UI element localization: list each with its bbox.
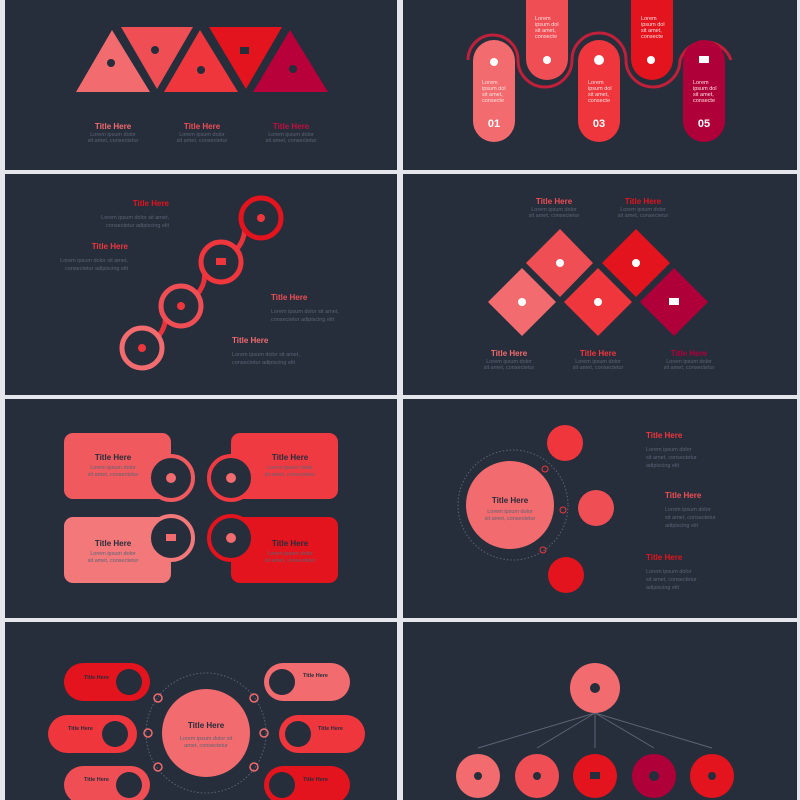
text 1: consectetur adipiscing elit	[106, 223, 169, 229]
pill 03: consecte	[588, 98, 610, 104]
text group 3: Lorem ipsum dolor	[268, 132, 314, 138]
connectors	[478, 713, 712, 748]
satellite texts: adipiscing elit	[646, 585, 679, 591]
box texts: Title Here	[272, 453, 309, 462]
box TL	[64, 433, 171, 499]
box texts: Lorem ipsum dolor	[267, 551, 313, 557]
text group 3	[266, 122, 317, 144]
box BR	[231, 517, 338, 583]
bottom texts: Title Here	[671, 349, 708, 358]
text group 1: Title Here	[95, 122, 132, 131]
circle 1	[122, 328, 162, 368]
pill texts: Title Here	[318, 726, 343, 732]
box texts: sit amet, consectetur	[88, 472, 139, 478]
triangle 3	[164, 30, 238, 92]
box texts: sit amet, consectetur	[265, 472, 316, 478]
pill 02	[526, 0, 568, 80]
pill 01: sit amet,	[482, 92, 503, 98]
text 2: consectetur adipiscing elit	[65, 266, 128, 272]
bottom texts: sit amet, consectetur	[664, 365, 715, 371]
pill 01: Lorem	[482, 80, 498, 86]
pill 04: consecte	[641, 34, 663, 40]
circles	[149, 456, 253, 560]
icons	[107, 46, 297, 74]
pill 02: consecte	[535, 34, 557, 40]
pill 05	[683, 40, 725, 142]
pills	[48, 663, 365, 800]
panel: hub circle	[403, 399, 797, 618]
pill 04	[631, 0, 673, 80]
panel: chain circles	[5, 174, 397, 395]
pill texts: Title Here	[68, 726, 93, 732]
satellite texts: Title Here	[646, 553, 683, 562]
pill 05: sit amet,	[693, 92, 714, 98]
satellite texts: sit amet, consectetur	[665, 515, 716, 521]
text 2: Title Here	[92, 242, 129, 251]
panel: diamonds	[403, 174, 797, 395]
center circle: Title Here	[188, 721, 225, 730]
bottom texts: sit amet, consectetur	[573, 365, 624, 371]
panel: triangles	[5, 0, 397, 170]
diamond 2	[602, 229, 670, 297]
pill 01: consecte	[482, 98, 504, 104]
panel: four boxes	[5, 399, 397, 618]
satellite texts: Lorem ipsum dolor	[646, 569, 692, 575]
bottom texts: Lorem ipsum dolor	[575, 359, 621, 365]
dotted ring	[146, 673, 266, 793]
circle 2	[161, 286, 201, 326]
pill 04: Lorem	[641, 16, 657, 22]
bottom texts: Title Here	[580, 349, 617, 358]
pill 02: sit amet,	[535, 28, 556, 34]
pill texts: Title Here	[84, 777, 109, 783]
diamond 5	[640, 268, 708, 336]
diamond 1	[526, 229, 593, 297]
text 4: Title Here	[232, 336, 269, 345]
bottom texts: sit amet, consectetur	[484, 365, 535, 371]
icons	[138, 214, 265, 352]
central circle: sit amet, consectetur	[485, 516, 536, 522]
center circle: Lorem ipsum dolor sit	[180, 736, 233, 742]
triangle 1	[76, 30, 150, 92]
panel: tree	[403, 622, 797, 800]
connectors	[157, 217, 245, 338]
top circle	[570, 663, 620, 713]
satellite texts: Title Here	[665, 491, 702, 500]
pill 04: sit amet,	[641, 28, 662, 34]
box texts: sit amet, consectetur	[88, 558, 139, 564]
pill 02: ipsum dol	[535, 22, 559, 28]
pill texts: Title Here	[303, 777, 328, 783]
nodes	[144, 694, 268, 771]
pill 05: consecte	[693, 98, 715, 104]
panel: six pills hub	[5, 622, 397, 800]
text 2	[60, 242, 129, 272]
box texts	[88, 453, 316, 564]
pill 03	[578, 40, 620, 142]
text group 2	[177, 122, 228, 144]
bottom texts: Title Here	[491, 349, 528, 358]
satellite texts: Lorem ipsum dolor	[646, 447, 692, 453]
dotted ring	[458, 450, 568, 560]
panel: pills wave	[403, 0, 797, 170]
pill 03: Lorem	[588, 80, 604, 86]
pill 04: ipsum dol	[641, 22, 665, 28]
box BL	[64, 517, 171, 583]
icons	[518, 259, 679, 306]
box texts: sit amet, consectetur	[265, 558, 316, 564]
bottom circles	[456, 754, 734, 798]
top texts: Title Here	[536, 197, 573, 206]
pill texts	[68, 673, 343, 783]
pill 03: 03	[593, 118, 605, 130]
wave line	[468, 33, 731, 87]
text group 3: sit amet, consectetur	[266, 138, 317, 144]
text 3	[271, 293, 339, 323]
text group 1: Lorem ipsum dolor	[90, 132, 136, 138]
pill texts: Title Here	[84, 675, 109, 681]
pill 03: ipsum dol	[588, 86, 612, 92]
box texts: Lorem ipsum dolor	[90, 465, 136, 471]
text 4: consectetur adipiscing elit	[232, 360, 295, 366]
bottom texts	[484, 349, 715, 371]
bottom texts: Lorem ipsum dolor	[486, 359, 532, 365]
text 4	[232, 336, 300, 366]
icons	[166, 473, 236, 543]
text 3: Title Here	[271, 293, 308, 302]
satellite texts: Title Here	[646, 431, 683, 440]
icons	[474, 771, 716, 781]
top texts: Title Here	[625, 197, 662, 206]
text group 2: Lorem ipsum dolor	[179, 132, 225, 138]
box texts: Title Here	[95, 453, 132, 462]
central circle: Title Here	[492, 496, 529, 505]
pill 01: ipsum dol	[482, 86, 506, 92]
satellite texts: adipiscing elit	[646, 463, 679, 469]
triangle 5	[253, 30, 328, 92]
satellite texts: sit amet, consectetur	[646, 455, 697, 461]
top texts: Lorem ipsum dolor	[620, 207, 666, 213]
triangle 2	[121, 27, 193, 89]
pill 02: Lorem	[535, 16, 551, 22]
text group 1: sit amet, consectetur	[88, 138, 139, 144]
text 3: consectetur adipiscing elit	[271, 317, 334, 323]
text group 2: Title Here	[184, 122, 221, 131]
text 1: Title Here	[133, 199, 170, 208]
pill texts: Title Here	[303, 673, 328, 679]
top texts	[529, 197, 669, 219]
box texts: Title Here	[95, 539, 132, 548]
top texts: sit amet, consectetur	[529, 213, 580, 219]
pill circles	[102, 669, 311, 798]
pill 01	[473, 40, 515, 142]
diamond 4	[564, 268, 632, 336]
box texts: Title Here	[272, 539, 309, 548]
satellite texts	[646, 431, 716, 591]
circle 4	[241, 198, 281, 238]
text 1	[101, 199, 170, 229]
box TR	[231, 433, 338, 499]
satellite texts: Lorem ipsum dolor	[665, 507, 711, 513]
top texts: sit amet, consectetur	[618, 213, 669, 219]
pill 05: ipsum dol	[693, 86, 717, 92]
pill 01: 01	[488, 118, 500, 130]
box texts: Lorem ipsum dolor	[90, 551, 136, 557]
satellite texts: adipiscing elit	[665, 523, 698, 529]
text group 2: sit amet, consectetur	[177, 138, 228, 144]
text 3: Lorem ipsum dolor sit amet,	[271, 309, 339, 315]
text group 1	[88, 122, 139, 144]
center circle: amet, consectetur	[184, 743, 228, 749]
text group 3: Title Here	[273, 122, 310, 131]
box texts: Lorem ipsum dolor	[267, 465, 313, 471]
central circle	[466, 461, 554, 549]
text 2: Lorem ipsum dolor sit amet,	[60, 258, 128, 264]
pill 05: 05	[698, 118, 710, 130]
top texts: Lorem ipsum dolor	[531, 207, 577, 213]
pill 05: Lorem	[693, 80, 709, 86]
text 4: Lorem ipsum dolor sit amet,	[232, 352, 300, 358]
satellite texts: sit amet, consectetur	[646, 577, 697, 583]
satellites	[540, 425, 614, 593]
text 1: Lorem ipsum dolor sit amet,	[101, 215, 169, 221]
center circle	[162, 689, 250, 777]
central circle: Lorem ipsum dolor	[487, 509, 533, 515]
circle 3	[201, 242, 241, 282]
diamond 3	[488, 268, 556, 336]
pill 03: sit amet,	[588, 92, 609, 98]
bottom texts: Lorem ipsum dolor	[666, 359, 712, 365]
triangle 4	[209, 27, 282, 89]
